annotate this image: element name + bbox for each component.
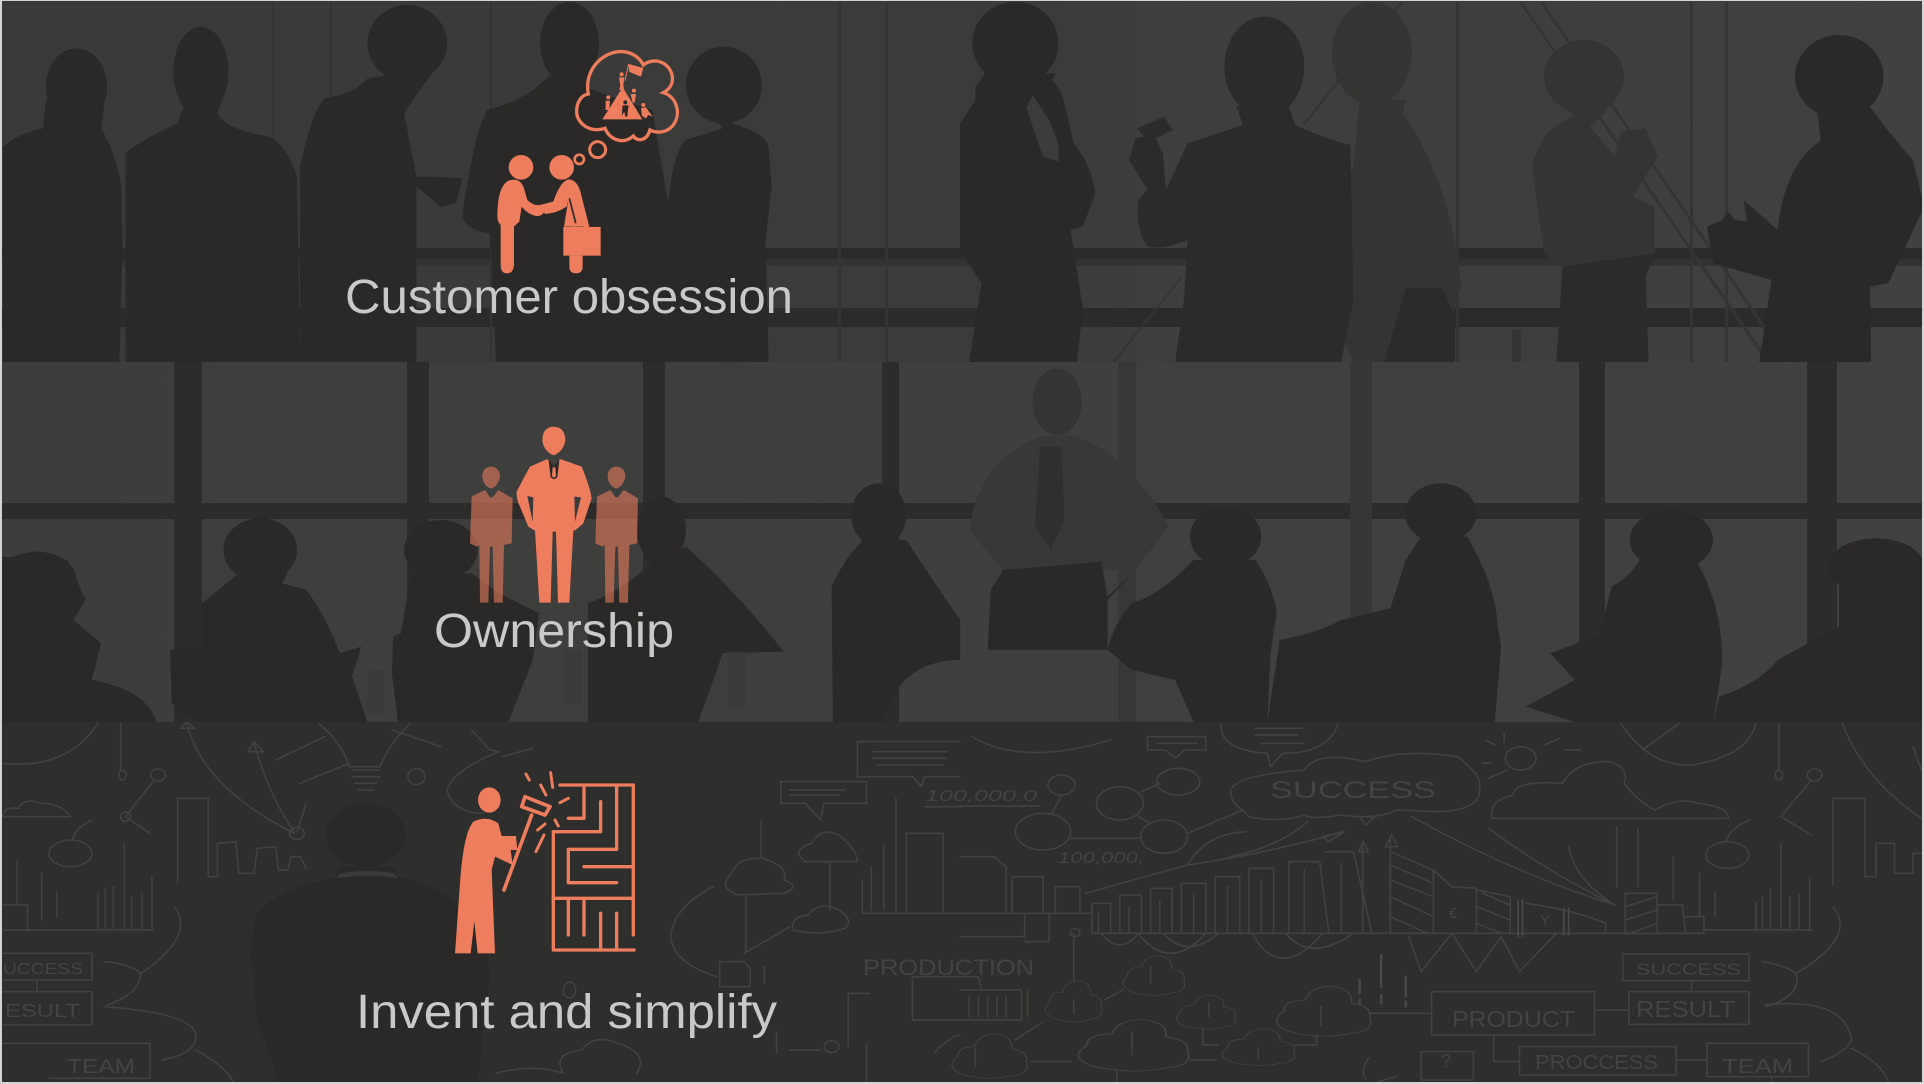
icon: leader standing between two team members [470, 427, 638, 603]
chalkboard text labels: ESULT [5, 1001, 80, 1021]
icon part: hammer and sparks [504, 773, 568, 890]
heading: ownership: Ownership [434, 605, 674, 658]
icon part: maze [553, 785, 634, 950]
chalkboard text labels: Y [1540, 912, 1550, 929]
chalkboard text labels: ? [1441, 1051, 1451, 1071]
chalkboard text labels [3, 777, 1793, 1078]
icon part: left team member [470, 467, 513, 603]
chalkboard text labels: TEAM [1722, 1056, 1793, 1078]
chalkboard text labels: 100,000.0 [925, 788, 1037, 805]
chalkboard text labels: SUCCESS [1270, 777, 1436, 804]
chalkboard text labels: PROCCESS [1535, 1052, 1658, 1074]
chalkboard text labels: SUCCESS [1636, 960, 1741, 979]
panel: ownership [0, 362, 1924, 722]
background figure: man seen from behind [338, 871, 398, 878]
icon part: person [455, 787, 517, 953]
chalkboard text labels: 100,000, [1058, 850, 1144, 867]
panel background [2, 722, 1922, 1082]
panel background [2, 362, 1922, 722]
chalkboard text labels: UCCESS [3, 961, 83, 978]
panel: customer obsession [0, 1, 1924, 362]
chalkboard text labels: PRODUCTION [863, 955, 1034, 980]
chalkboard text labels: RESULT [1636, 996, 1735, 1022]
icon part: right team member [595, 467, 638, 603]
background photo: silhouettes in a meeting room [0, 362, 1924, 722]
chalkboard text labels: TEAM [67, 1056, 135, 1078]
heading: invent and simplify: Invent and simplify [356, 986, 777, 1039]
heading: customer obsession: Customer obsession [345, 271, 793, 324]
background photo: chalkboard business sketches [0, 722, 1924, 1082]
background photo: silhouettes of business people talking [0, 2, 1924, 362]
panel: invent and simplify [0, 722, 1924, 1082]
chalkboard text labels: € [1449, 905, 1458, 922]
chalkboard text labels: PRODUCT [1452, 1006, 1575, 1032]
icon: handshake with thought cloud of team on a mountain [497, 52, 677, 273]
panel background [2, 1, 1922, 362]
icon: person breaking through a maze with a hammer [455, 773, 634, 953]
icon part: leader in suit [517, 427, 592, 603]
